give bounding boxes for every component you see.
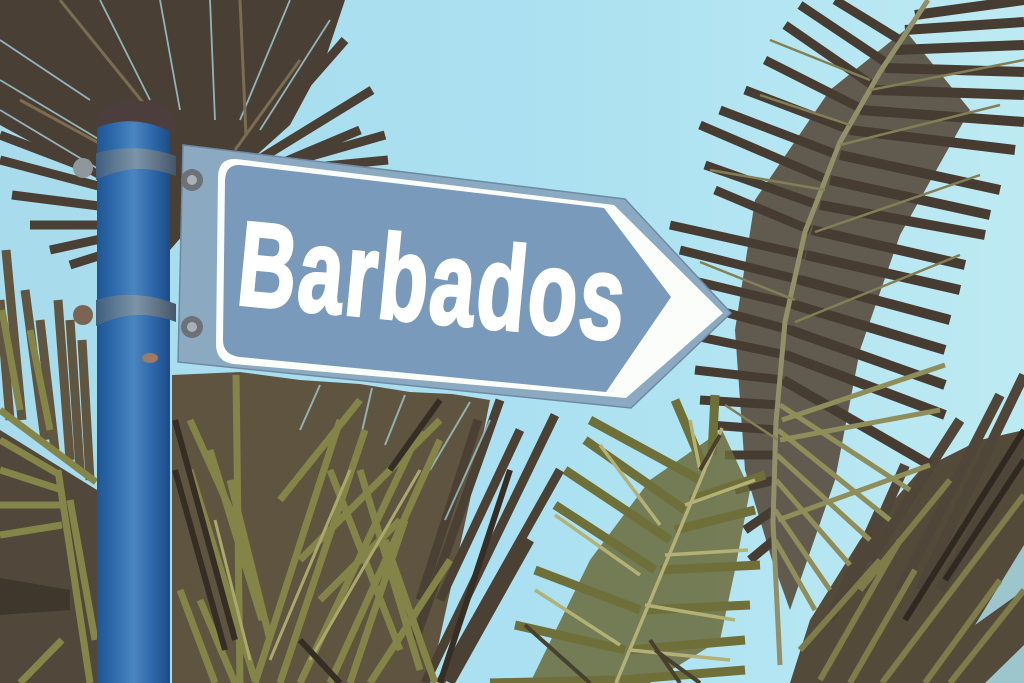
road sign arrow <box>178 145 731 408</box>
palm frond: centre olive <box>490 395 765 683</box>
palm frond: lower left <box>0 250 97 683</box>
sign label: Barbados <box>233 195 633 366</box>
palm frond: lower centre <box>172 372 560 683</box>
rust spot <box>142 353 158 363</box>
blue panel <box>223 165 671 392</box>
lower clamp <box>73 295 203 338</box>
palm frond: top left <box>0 0 388 265</box>
white border <box>216 159 723 398</box>
palm frond: large right <box>670 0 1024 665</box>
upper clamp <box>73 148 203 191</box>
sign backing plate <box>178 145 731 408</box>
palm frond: bottom right <box>790 375 1024 683</box>
signpost pole <box>96 101 175 683</box>
pole cap <box>96 101 175 134</box>
bolts <box>73 158 93 178</box>
